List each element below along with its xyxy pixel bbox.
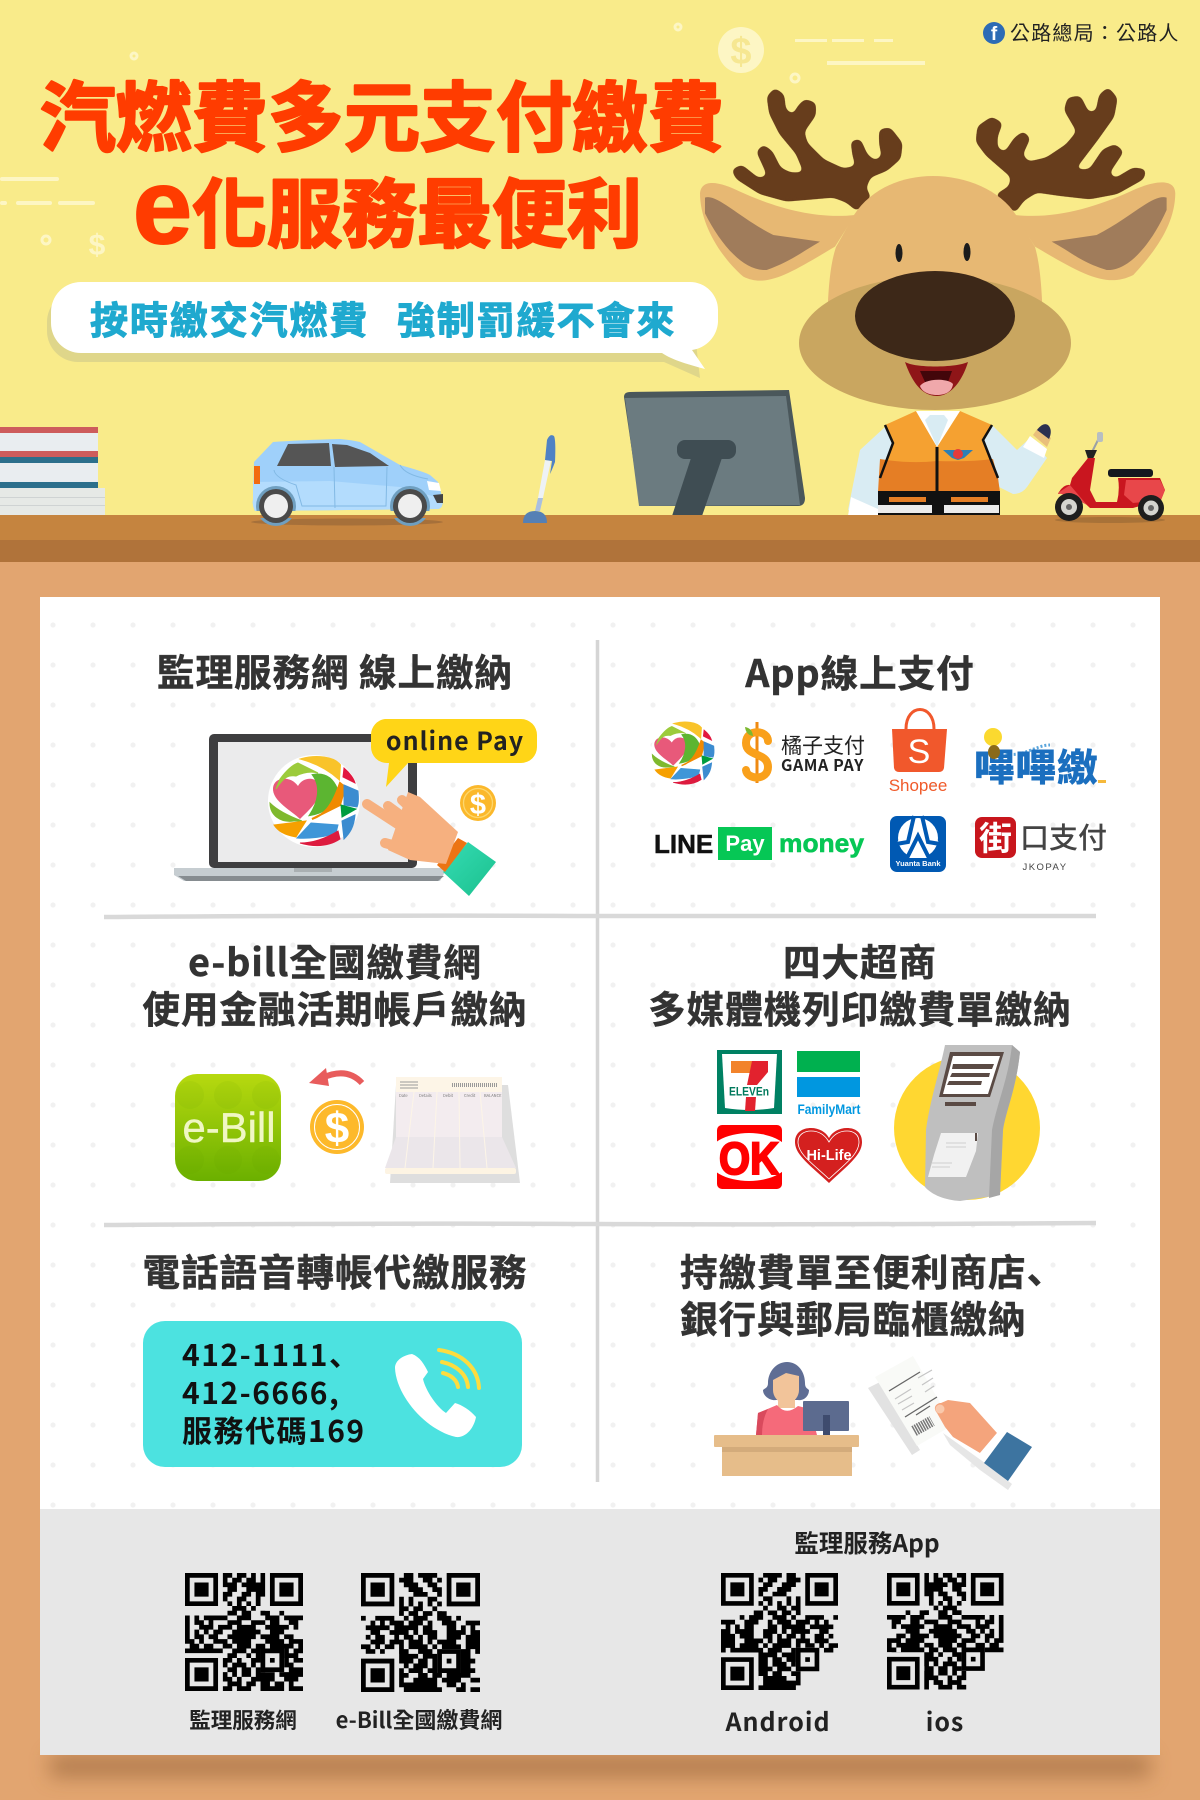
- deer antlers: [733, 88, 1145, 212]
- deer mouth: [905, 362, 968, 396]
- QR code: e-Bill: [361, 1573, 480, 1692]
- arrow: return: [309, 1068, 362, 1086]
- title: [40, 57, 724, 266]
- section: online portal: [157, 642, 537, 896]
- phone numbers text: 412-1111、: [182, 1331, 360, 1375]
- logo: LINE Pay Money: LINE: [654, 829, 713, 859]
- deer body: shirt and vest: [848, 411, 1051, 516]
- background decorations: coins and dashes: $: [89, 229, 106, 262]
- QR labels: e-Bill全國繳費網: [336, 1703, 502, 1735]
- icon: pen: [523, 435, 555, 523]
- icon: passbook: BALANCE: [484, 1093, 502, 1099]
- icon: passbook: Date: [399, 1093, 408, 1099]
- QR labels: ios: [926, 1703, 964, 1739]
- heading: 四大超商: [783, 932, 937, 987]
- heading: [680, 1242, 1054, 1344]
- logo: JKOPAY: 街: [979, 812, 1012, 860]
- QR labels: [189, 1703, 964, 1739]
- logo: bee payment: 嗶嗶繳: [974, 737, 1098, 792]
- icon: passbook: Credit: [464, 1093, 476, 1099]
- icon: laptop with payment logo: [174, 734, 447, 881]
- QR labels: Android: [724, 1703, 831, 1739]
- icon: kiosk: [894, 1045, 1040, 1201]
- logo: Hi-Life: Hi-Life: [806, 1148, 852, 1164]
- background decorations: coins and dashes: $: [730, 31, 752, 73]
- logo: Yuanta Bank: Yuanta Bank: [895, 859, 941, 868]
- QR code: portal: [185, 1573, 303, 1691]
- logo: FamilyMart: [797, 1051, 861, 1117]
- icon: hand with bill: [868, 1356, 1032, 1490]
- callout: online Pay: online Pay: [386, 722, 524, 758]
- heading: [648, 932, 1072, 1034]
- section: app payment: [651, 643, 1107, 873]
- deer mascot: [700, 88, 1175, 516]
- title: e: [133, 148, 192, 266]
- header background: [0, 0, 1200, 520]
- logo: OK: OK: [719, 1133, 779, 1184]
- logo: LINE Pay Money: money: [779, 828, 865, 858]
- icon: coin: [460, 785, 496, 821]
- heading: 電話語音轉帳代繳服務: [142, 1242, 528, 1297]
- icon: monitor: [624, 390, 805, 516]
- QR code: iOS: [887, 1573, 1004, 1690]
- logo: JKOPAY: JKOPAY: [1022, 862, 1068, 873]
- icon: passbook: [385, 1077, 520, 1183]
- icon: stack of books: [0, 427, 105, 515]
- icon: coin: $: [325, 1104, 349, 1153]
- logo: government payment globe: [651, 721, 715, 785]
- QR labels: 監理服務網: [189, 1704, 297, 1735]
- label: app group: 監理服務App: [794, 1525, 940, 1560]
- icon: car: [251, 439, 443, 526]
- heading: 、: [1016, 1250, 1054, 1305]
- icon: passbook: Debit: [443, 1093, 454, 1099]
- icon: teller at desk: [714, 1362, 859, 1476]
- heading: 持繳費單至便利商店: [680, 1242, 1026, 1297]
- heading: 銀行與郵局臨櫃繳納: [680, 1289, 1026, 1344]
- callout: online Pay: [371, 719, 537, 787]
- QR code: Android: [721, 1573, 838, 1690]
- logo: LINE Pay Money: [654, 827, 865, 860]
- logo: Shopee: Shopee: [889, 776, 947, 795]
- logo: 7-Eleven: [717, 1050, 782, 1114]
- speech bubble subtitle: [47, 282, 718, 378]
- background decorations: coins and dashes: [0, 24, 925, 262]
- logo: JKOPAY: 口支付: [1020, 815, 1107, 857]
- section: e-bill: [142, 932, 528, 1183]
- logo: e-Bill: e-Bill: [182, 1104, 276, 1151]
- title: 汽燃費多元支付繳費: [40, 57, 724, 167]
- section: telephone: [142, 1242, 528, 1467]
- section: convenience stores: [648, 932, 1072, 1201]
- heading: e-bill全國繳費網: [188, 932, 482, 987]
- section: counter payment: [680, 1242, 1054, 1490]
- phone numbers text: 服務代碼169: [182, 1407, 366, 1451]
- heading: 多媒體機列印繳費單繳納: [648, 979, 1072, 1034]
- icon: phone: [395, 1350, 479, 1437]
- heading: App線上支付: [744, 643, 975, 698]
- section: QR codes: [185, 1525, 1004, 1739]
- title: 化服務最便利: [192, 154, 642, 263]
- deer ears: [700, 182, 1175, 281]
- Facebook page credit: f: [991, 24, 998, 45]
- logo: e-Bill: [175, 1074, 281, 1181]
- logo: Gama Pay: [745, 722, 865, 783]
- icon: scooter: [1055, 432, 1165, 523]
- deer muzzle: [799, 276, 1071, 410]
- deer nose: [855, 271, 1015, 361]
- icon: coin: [310, 1100, 364, 1154]
- phone numbers text: 412-6666,: [182, 1369, 340, 1413]
- icon: coin: $: [470, 789, 486, 821]
- icon: pointing hand: [367, 792, 496, 896]
- logo: Shopee: [889, 710, 947, 795]
- Facebook page credit: 公路總局：公路人: [1010, 17, 1180, 46]
- logo: Gama Pay: GAMA PAY: [781, 752, 864, 776]
- logo: Gama Pay: 橘子支付: [781, 730, 865, 760]
- logo: Hi-Life: [795, 1128, 862, 1183]
- logo: 7-Eleven: ELEVEn: [729, 1084, 769, 1098]
- logo: JKOPAY: [975, 812, 1107, 873]
- logo: FamilyMart: FamilyMart: [798, 1102, 861, 1117]
- logo: Yuanta Bank: [890, 816, 946, 872]
- speech bubble subtitle: 強制罰緩不會來: [397, 290, 676, 345]
- desk: [0, 515, 1200, 562]
- heading: 使用金融活期帳戶繳納: [142, 979, 528, 1034]
- main panel: [40, 597, 1160, 1777]
- phone numbers text: [182, 1331, 366, 1451]
- deer eyes: [896, 243, 970, 262]
- logo: LINE Pay Money: Pay: [725, 831, 765, 856]
- heading: [142, 932, 528, 1034]
- deer head: [827, 176, 1043, 350]
- panel: phone numbers: [143, 1321, 522, 1467]
- heading: 監理服務網 線上繳納: [157, 642, 513, 697]
- icon: passbook: Details: [419, 1093, 432, 1099]
- logo: Shopee: S: [908, 733, 930, 771]
- speech bubble subtitle: 按時繳交汽燃費: [90, 290, 369, 345]
